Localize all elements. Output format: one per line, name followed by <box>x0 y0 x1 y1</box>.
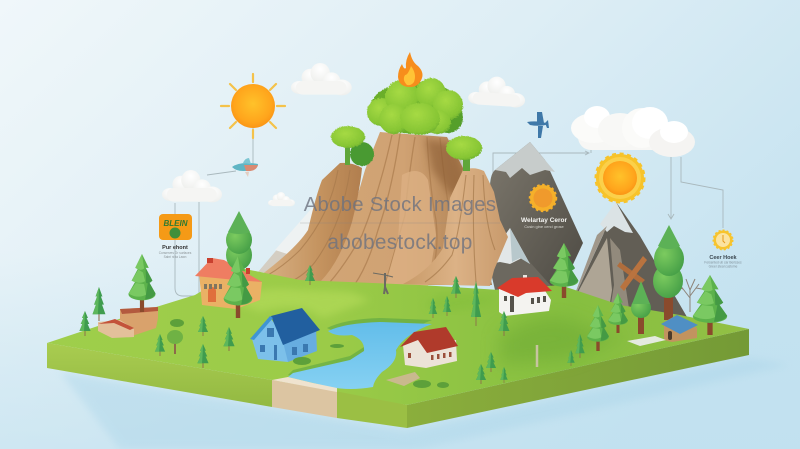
trees: right pines <box>550 243 727 351</box>
badge: left logo <box>159 214 192 240</box>
trees: small pines <box>79 265 585 384</box>
mountain: front gray <box>570 202 687 330</box>
sand path <box>272 377 337 392</box>
tree: tall round by orange house <box>226 211 252 270</box>
tree: tall round right <box>653 225 684 320</box>
mountain: left brown <box>257 163 362 282</box>
label: left: Sabri ni ta Lawn <box>164 255 187 259</box>
grass shading <box>230 289 630 365</box>
label: right: Forsented ub car Berisses <box>704 260 742 264</box>
platform: front left face <box>337 388 407 428</box>
house: red roof near lake <box>400 327 458 368</box>
icon: left plane <box>232 158 258 177</box>
far left hazy peaks <box>258 208 325 275</box>
lake <box>288 318 432 389</box>
mountain: central brown <box>295 132 492 286</box>
building: left low <box>98 307 158 338</box>
tree: right summit <box>446 136 482 171</box>
solar panels <box>627 336 666 346</box>
person: far <box>536 345 538 367</box>
mountain: small snowy <box>488 228 552 290</box>
label: left: Pur ehont <box>162 245 188 251</box>
tree: big left pine <box>128 254 156 312</box>
label: center: Welartay Ceror <box>521 217 568 224</box>
cloud: top center <box>291 63 352 95</box>
watermark: Abobe Stock Images <box>304 194 496 216</box>
label: left <box>159 245 192 259</box>
connector lines <box>175 128 723 296</box>
label: left: Conserves Or surfaces <box>159 251 192 255</box>
house: orange <box>195 258 262 309</box>
house: solar hut <box>661 315 698 342</box>
platform: right side face <box>407 329 749 428</box>
label: center <box>521 217 568 229</box>
label: right: Greer steal custome <box>709 264 738 268</box>
house: blue <box>250 308 320 362</box>
dock <box>386 372 420 386</box>
bushes <box>170 319 449 388</box>
bare tree <box>677 279 702 312</box>
tree: round pine <box>631 281 651 334</box>
mountain: back gray <box>490 142 583 292</box>
tree: pine by orange house <box>224 256 252 318</box>
tree: left summit <box>331 126 374 166</box>
foliage crown <box>367 78 463 135</box>
platform: sand inlet <box>272 378 337 418</box>
badge: left logo: BLEIN <box>164 219 188 228</box>
mountain: right brown <box>403 168 508 286</box>
watermark <box>300 194 500 254</box>
label: right <box>704 255 742 268</box>
cloud: top right small <box>468 75 527 108</box>
label: right: Ceer Hoek <box>709 255 738 261</box>
platform: left side face <box>47 343 272 407</box>
icon: blue plane <box>527 112 549 138</box>
cloud: left <box>162 170 222 202</box>
platform: grass top <box>47 268 749 405</box>
icon: right sun badge <box>714 230 732 250</box>
icon: flame <box>398 52 422 87</box>
person: hiker <box>373 273 393 294</box>
watermark: abobestock.top <box>327 231 473 254</box>
windmill <box>617 256 647 291</box>
icon: left sun <box>221 74 285 138</box>
ground shadow <box>60 358 790 449</box>
cloud: small center-left <box>268 192 295 206</box>
house: white with red roof <box>497 275 552 316</box>
tree: small round <box>167 330 183 354</box>
label: center: Cusin gine cerci grose <box>524 224 565 229</box>
cloud: large right <box>571 106 695 157</box>
icon: center sun badge <box>530 185 556 211</box>
icon: right sun <box>596 154 644 202</box>
